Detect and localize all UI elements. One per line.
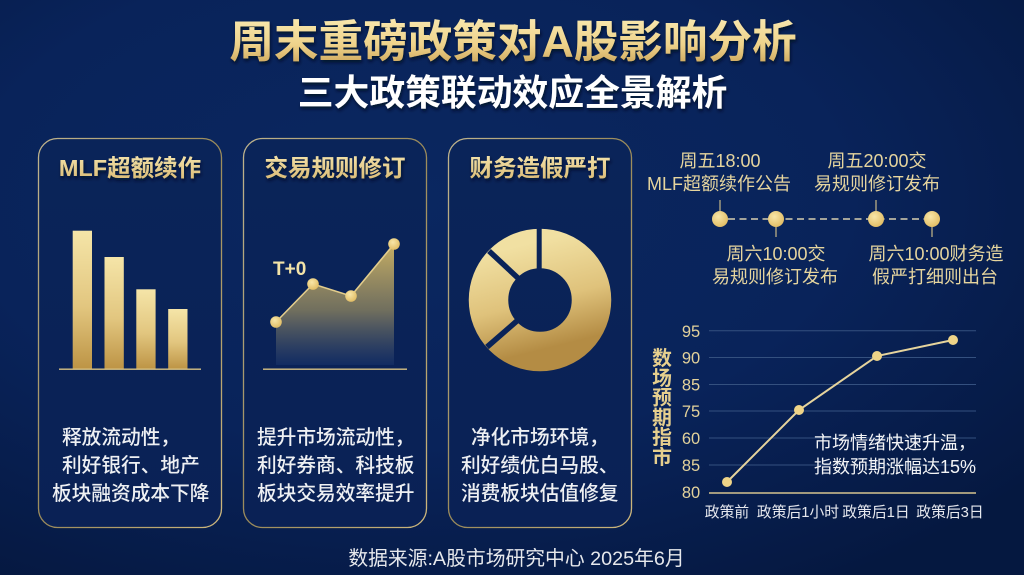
timeline: [647, 151, 1004, 287]
y axis labels: 85: [682, 457, 700, 475]
panel heading: MLF: MLF超额续作: [59, 155, 201, 181]
timeline node 1: MLF超额续作公告: [647, 174, 791, 194]
callout: 市场情绪快速升温，: [814, 433, 976, 453]
timeline node 4: [868, 211, 1004, 287]
x axis labels: 政策前: [705, 504, 749, 521]
timeline node 3: 易规则修订发布: [814, 174, 940, 194]
data points: [722, 335, 958, 487]
panel text: fraud crackdown effect: 消费板块估值修复: [461, 483, 619, 505]
panel text: trading rules effect: 提升市场流动性，: [257, 427, 414, 449]
y axis labels: 85: [682, 376, 700, 394]
panel: 交易规则修订: [244, 138, 426, 528]
y axis labels: 80: [682, 484, 700, 502]
timeline node 1: [647, 151, 791, 227]
x axis labels: 政策后1日: [842, 504, 910, 521]
y axis labels: [682, 323, 700, 502]
timeline node 4: 假严打细则出台: [872, 267, 998, 287]
panel text: MLF effect: 利好银行、地产: [62, 455, 200, 477]
timeline node 4: 周六10:00财务造: [868, 244, 1004, 264]
y axis labels: 95: [682, 323, 700, 341]
panel text: trading rules effect: 板块交易效率提升: [257, 483, 414, 505]
y axis labels: 90: [682, 350, 700, 368]
y axis title: 指: [652, 427, 672, 449]
y axis title: 期: [652, 407, 672, 429]
panel text: trading rules effect: 利好券商、科技板: [257, 455, 415, 477]
y axis labels: 75: [682, 403, 700, 421]
footer source: 数据来源:A股市场研究中心 2025年6月: [348, 548, 685, 570]
panel text: MLF effect: 板块融资成本下降: [52, 483, 210, 505]
callout: 指数预期涨幅达15%: [814, 457, 976, 477]
data line: [727, 340, 953, 482]
timeline node 3: [814, 151, 940, 227]
x axis labels: 政策后1小时: [757, 504, 839, 521]
donut chart: three segments: [487, 225, 592, 352]
panel heading: fraud crackdown: 财务造假严打: [470, 155, 610, 181]
panel text: fraud crackdown effect: 净化市场环境，: [471, 427, 609, 449]
y axis title: 场: [652, 368, 672, 390]
y axis title: 预: [652, 388, 672, 410]
x axis labels: [705, 504, 984, 521]
timeline node 2: 易规则修订发布: [712, 267, 838, 287]
timeline node 1: 周五18:00: [679, 151, 761, 171]
panel text: MLF effect: 释放流动性，: [62, 427, 180, 449]
timeline node 2: 周六10:00交: [726, 244, 826, 264]
panel: 财务造假严打: [448, 138, 632, 528]
timeline node 3: 周五20:00交: [827, 151, 927, 171]
panel text: fraud crackdown effect: 利好绩优白马股、: [461, 455, 618, 477]
line chart: market expectation index: [652, 323, 984, 521]
timeline node 2: [712, 211, 838, 287]
y axis labels: 60: [682, 430, 700, 448]
area chart: T+0: T+0: [273, 259, 306, 280]
bar chart: four descending bars: [59, 231, 201, 369]
y axis title: 市: [652, 446, 672, 469]
x axis labels: 政策后3日: [916, 504, 984, 521]
panel: MLF超额续作: [38, 138, 222, 528]
subtitle: 三大政策联动效应全景解析: [298, 73, 727, 113]
y axis title: 数: [652, 348, 672, 370]
title: 周末重磅政策对A股影响分析: [229, 18, 797, 67]
area chart: T+0: [263, 238, 407, 369]
panel heading: trading rules: 交易规则修订: [264, 154, 406, 181]
